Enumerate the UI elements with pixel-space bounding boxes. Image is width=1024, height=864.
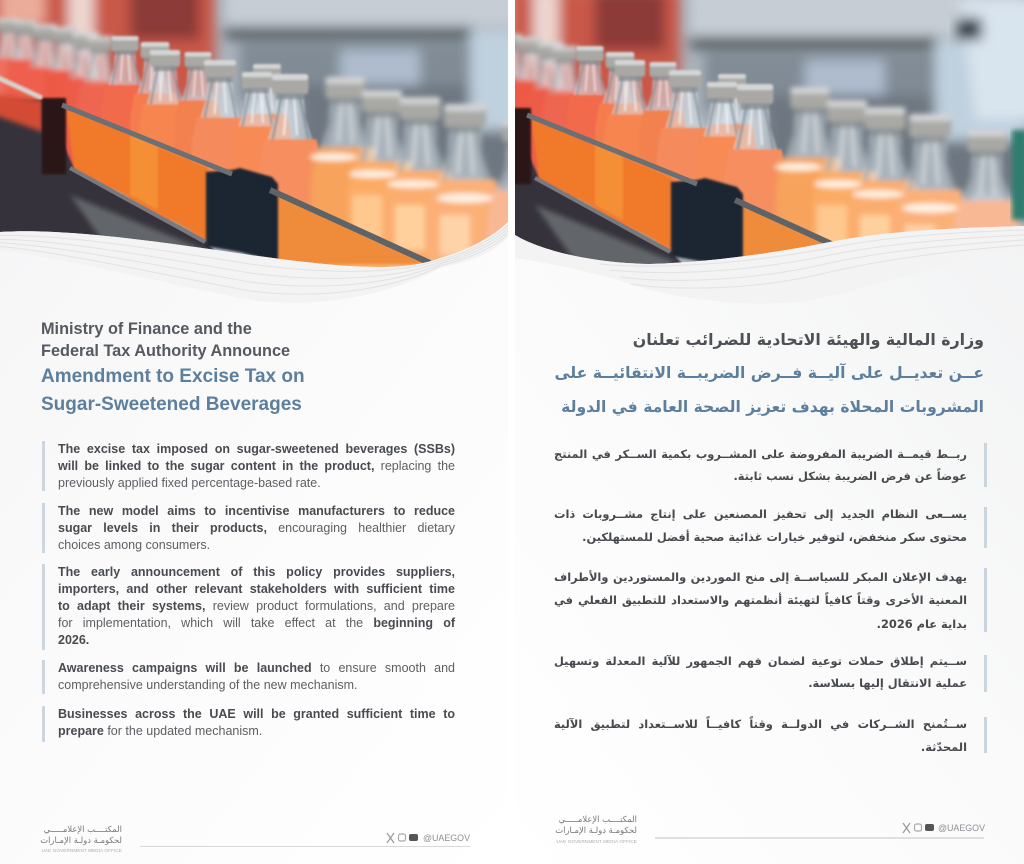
- gutter between panels: [508, 0, 515, 864]
- background art: photos and waves: [0, 0, 1024, 578]
- text block: Arabic point 5: [515, 717, 987, 753]
- text block: Arabic point 1: عوضاً عن فرض الضريبة بشكل نسب ثابتة.: [733, 469, 967, 483]
- text block: Arabic point 3: يهدف الإعلان المبكر للسياســة إلى منح الموردين والمستوردين والأطراف: [554, 570, 967, 584]
- social icons: [902, 822, 934, 834]
- photo: right bottling line: [515, 0, 1024, 264]
- text block: English point 5: [42, 706, 458, 742]
- text block: Arabic point 2: [515, 507, 987, 548]
- logo: UAE Government Media Office: المكتــــب الإعلامـــــي: [44, 824, 122, 834]
- heading: English amendment title: Amendment to Excise Tax on: [41, 366, 305, 387]
- text block: English point 1: previously applied fixed percentage-based rate.: [58, 476, 321, 490]
- footer: right: [555, 814, 985, 844]
- text block: English point 4: Awareness campaigns will be launched to ensure smooth and: [58, 661, 455, 675]
- text block: English point 1: will be linked to the sugar content in the product, replacing the: [58, 459, 455, 473]
- social icons: [386, 832, 418, 844]
- photo: left bottling line: [0, 0, 508, 267]
- text block: Arabic point 4: ســيتم إطلاق حملات توعية لضمان فهم الجمهور للآلية المعدلة وتسهيل: [554, 654, 967, 668]
- text block: Arabic point 2: محتوى سكر منخفض، لتوفير خيارات غذائية صحية أفضل للمستهلكين.: [582, 530, 967, 544]
- text block: English point 2: [42, 503, 458, 553]
- text block: Arabic point 2: يســعى النظام الجديد إلى تحفيز المصنعين على إنتاج مشــروبات ذات: [554, 507, 967, 521]
- text block: English point 4: comprehensive understanding of the new mechanism.: [58, 678, 357, 692]
- social handle: @UAEGOV: [938, 823, 985, 833]
- wave: right lower panel: [515, 226, 1024, 864]
- logo: UAE Government Media Office: [40, 824, 122, 853]
- text block: Arabic point 1: [515, 443, 987, 487]
- logo: UAE Government Media Office: [555, 814, 637, 844]
- logo: UAE Government Media Office: المكتــــب الإعلامـــــي: [559, 814, 637, 824]
- text block: English point 3: [42, 564, 458, 650]
- text block: English point 3: for implementation, which will take effect at the beginning of: [58, 616, 455, 630]
- heading: Arabic ministry line: وزارة المالية والهيئة الاتحادية للضرائب تعلنان: [633, 330, 984, 349]
- text block: English point 3: importers, and other relevant stakeholders with sufficient time: [58, 582, 455, 596]
- text block: Arabic point 3: بداية عام 2026.: [877, 617, 967, 631]
- text block: Arabic point 5: ســتُمنح الشــركات في الدولــة وقتاً كافيــاً للاســتعداد لتطبيق الآلية: [554, 717, 967, 731]
- text block: English point 2: choices among consumers.: [58, 538, 210, 552]
- text block: Arabic point 3: [515, 568, 987, 632]
- text block: English point 3: to adapt their systems, review product formulations, and prepare: [58, 599, 455, 613]
- text block: English point 2: sugar levels in their products, encouraging healthier dietary: [58, 521, 455, 535]
- text block: Arabic point 4: [515, 655, 987, 692]
- text block: English point 1: The excise tax imposed on sugar-sweetened beverages (SSBs): [58, 442, 455, 456]
- text block: English point 3: 2026.: [58, 633, 89, 647]
- text block: English point 5: prepare for the updated mechanism.: [58, 724, 262, 738]
- logo: UAE Government Media Office: لحكومـة دولـة الإمـارات: [555, 825, 637, 835]
- social handle: @UAEGOV: [423, 833, 470, 843]
- heading: Arabic amendment title: عــن تعديــل على آليــة فــرض الضريبــة الانتقائيــة على: [555, 364, 984, 382]
- text block: English point 4: [42, 660, 458, 694]
- text block: English point 2: The new model aims to incentivise manufacturers to reduce: [58, 504, 455, 518]
- logo: UAE Government Media Office: UAE GOVERNMENT MEDIA OFFICE: [42, 848, 122, 853]
- text block: Arabic point 3: المعنية الأخرى وقتاً كافياً لتهيئة أنظمتهم والاستعداد للتطبيق الفعلي في: [554, 593, 967, 607]
- heading: English ministry line: [41, 320, 290, 360]
- heading: English amendment title: [41, 366, 305, 415]
- wave: left lower panel: [0, 222, 508, 864]
- logo: UAE Government Media Office: لحكومـة دولـة الإمـارات: [40, 835, 122, 845]
- text block: Arabic point 4: عملية الانتقال إليها بسلاسة.: [808, 676, 967, 690]
- text block: Arabic point 1: ربــط قيمــة الضريبة المفروضة على المشــروب بكمية الســكر في المنتج: [554, 447, 967, 461]
- heading: Arabic amendment title: [555, 363, 984, 416]
- footer: left: [40, 824, 470, 853]
- heading: English ministry line: Ministry of Finance and the: [41, 320, 252, 338]
- heading: Arabic amendment title: المشروبات المحلاة بهدف تعزيز الصحة العامة في الدولة: [561, 398, 984, 416]
- text block: English point 5: Businesses across the UAE will be granted sufficient time to: [58, 707, 455, 721]
- heading: English ministry line: Federal Tax Authority Announce: [41, 342, 290, 360]
- text block: Arabic point 5: المحدّثة.: [921, 740, 967, 754]
- heading: English amendment title: Sugar-Sweetened Beverages: [41, 394, 302, 415]
- text block: English point 1: [42, 441, 458, 491]
- logo: UAE Government Media Office: UAE GOVERNMENT MEDIA OFFICE: [556, 839, 637, 844]
- text block: English point 3: The early announcement of this policy provides suppliers,: [58, 565, 455, 579]
